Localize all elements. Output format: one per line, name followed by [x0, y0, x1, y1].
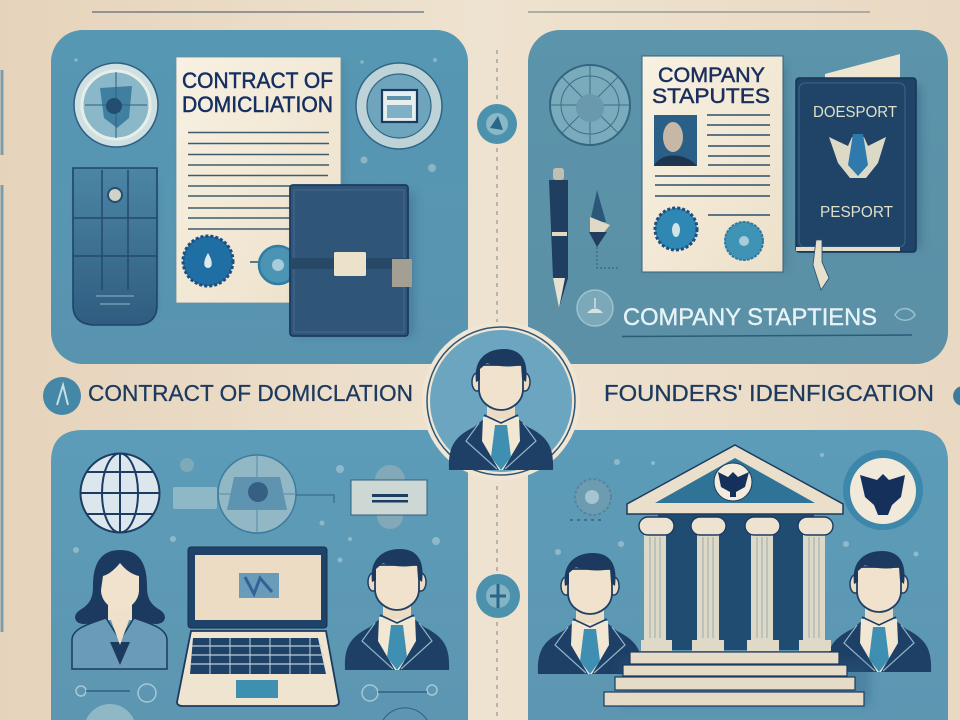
person: man left [538, 553, 642, 674]
small dots [74, 58, 437, 172]
temple steps [604, 652, 864, 706]
icon: nib marker [589, 190, 619, 268]
column two [691, 517, 726, 651]
building: temple [604, 445, 870, 706]
label text: CONTRACT OF DOMICLATION [88, 380, 413, 406]
document: statutes [642, 56, 783, 272]
icon: pen [549, 168, 568, 308]
icon: left seal medallion [74, 63, 158, 147]
cropped arcs at bottom [86, 704, 427, 720]
panel: company statutes [528, 30, 948, 364]
icon: laptop [177, 547, 339, 706]
panel: banking and institution [528, 430, 948, 720]
label: founders identification [604, 380, 960, 406]
icon: globe seal [550, 65, 630, 145]
icon: central seal [218, 455, 334, 533]
icon: eagle medallion [843, 450, 923, 530]
bookmark [813, 240, 829, 290]
connector dots [76, 684, 437, 702]
panel background [528, 430, 948, 720]
seal one [655, 208, 697, 250]
screen glyph [239, 573, 279, 598]
left edge marks [0, 70, 4, 632]
label text: FOUNDERS' IDENFIGCATION [604, 380, 934, 406]
document title: STAPUTES [652, 85, 770, 108]
column one [639, 517, 674, 651]
pediment emblem [714, 463, 752, 501]
icon: document folder device [73, 168, 157, 325]
step marker: top [477, 104, 517, 144]
person: man right [345, 549, 449, 670]
small ornament [895, 309, 915, 320]
central medallion [422, 322, 580, 480]
panel caption: COMPANY STAPTIENS [623, 304, 877, 331]
label icon glyph [57, 385, 68, 405]
seal two [725, 222, 763, 260]
temple back wall [658, 514, 814, 650]
column three [745, 517, 780, 651]
small marks [555, 453, 918, 556]
top rule [92, 11, 870, 13]
person: man right [827, 551, 931, 672]
label: contract of domiciliation [43, 377, 413, 415]
wax seal two [250, 246, 297, 284]
document title [652, 64, 770, 108]
icon: small circle sprout [577, 290, 613, 326]
central dashed connector [496, 50, 498, 720]
panel: contract of domiciliation [51, 30, 468, 364]
panel background [51, 30, 468, 364]
passport subtitle: PESPORT [820, 204, 893, 221]
document shadow [182, 64, 342, 294]
document text lines [655, 115, 770, 215]
document title: CONTRACT OF [182, 68, 333, 93]
temple shadow [620, 660, 870, 705]
document: contract [176, 57, 341, 303]
person: woman [72, 550, 167, 669]
medallion inner [430, 330, 572, 472]
icon: worn seal [570, 479, 611, 520]
pediment [627, 445, 843, 514]
medallion ring [422, 322, 580, 480]
document text lines [188, 132, 329, 229]
icon: right form medallion [356, 63, 442, 149]
label icon [43, 377, 81, 415]
wallet shadow [296, 192, 414, 336]
document title: COMPANY [658, 64, 765, 87]
laptop base [177, 631, 339, 706]
label icon [953, 386, 960, 406]
laptop screen [195, 555, 321, 620]
medallion person [449, 349, 553, 470]
caption rule [622, 335, 912, 336]
document title: DOMICLIATION [182, 92, 333, 117]
passport emblem [829, 134, 886, 178]
panel: registration and online [51, 430, 468, 720]
small marks [73, 465, 440, 562]
icon: id card [351, 465, 427, 529]
icon: stub tab [173, 458, 217, 509]
wax seal one [183, 236, 233, 286]
document title [182, 68, 333, 117]
id photo [654, 115, 697, 166]
icon: leather wallet [290, 185, 412, 336]
document shadow [650, 64, 786, 269]
passport title: DOESPORT [813, 104, 897, 121]
column four [798, 517, 833, 651]
icon: globe [80, 454, 160, 532]
trackpad [236, 680, 278, 698]
panel background [528, 30, 948, 364]
passport [796, 54, 920, 290]
panel background [51, 430, 468, 720]
keyboard [190, 638, 326, 674]
step marker: bottom [476, 574, 520, 618]
